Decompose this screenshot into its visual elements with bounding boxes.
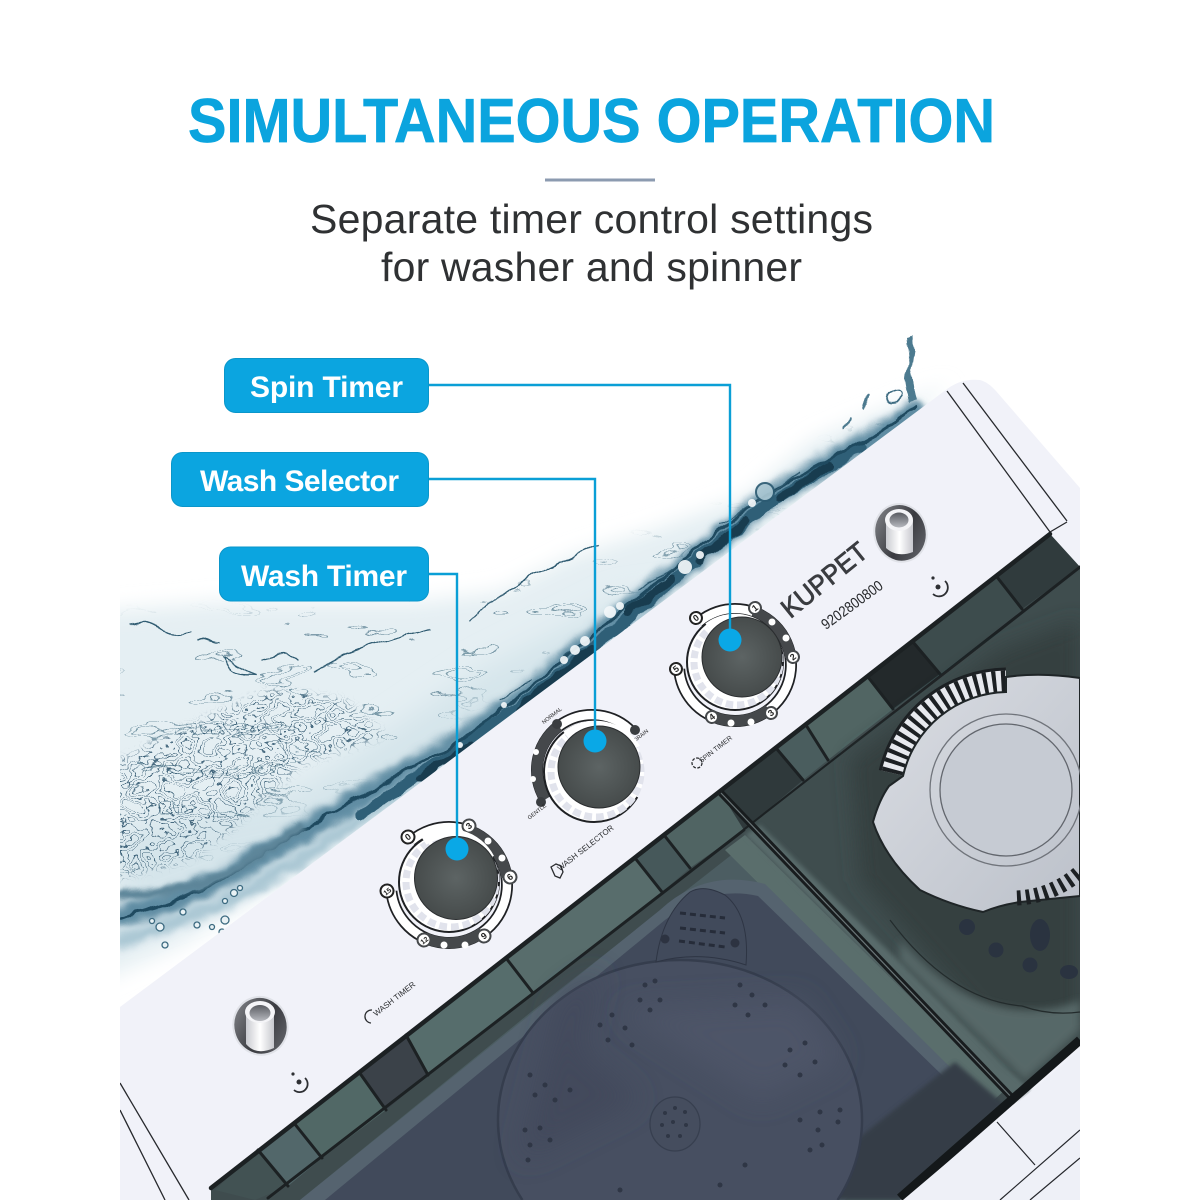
dial numbers: 9 [479,931,489,941]
right spin tub [721,570,1080,1102]
divider between tubs [721,793,1016,1102]
drain button right [868,498,933,568]
marker dot: spin timer [718,628,742,652]
leader line: wash timer [429,574,457,849]
label: wash timer [220,547,428,601]
indicator icon left [291,1072,308,1092]
foam scribbles [130,470,800,700]
tub navy [300,880,960,1200]
divider bar [545,178,655,182]
bottom black frame edge [900,1040,1080,1198]
water bubbles [150,886,242,948]
plate hub [650,1097,700,1151]
dial numbers: 6 [505,872,515,882]
vent ring lower [1017,872,1080,898]
perforations [522,978,842,1192]
lid circles [930,714,1082,866]
panel printed labels [365,735,734,1023]
subtitle [310,196,873,290]
wash selector icon [551,864,563,878]
wash timer knob [367,803,531,967]
frame strip lines [211,534,1080,1198]
subtitle: for washer and spinner [381,244,802,290]
spin dial numbers: 3 [766,708,776,718]
label: wash selector: Wash Selector [200,465,399,498]
spinner holes [959,919,1078,979]
frame strip segments [215,534,1080,1200]
left wash tub [300,835,1005,1200]
dial numbers: 3 [464,821,474,831]
label: wash selector [172,452,428,506]
indicator icon right [931,576,948,596]
splash spike [846,336,916,428]
bottom right white body [903,1092,1080,1200]
selector labels: NORMAL [541,707,564,726]
model number: 9202800800 [818,577,886,633]
label: spin timer: Spin Timer [250,371,403,404]
title: SIMULTANEOUS OPERATION [188,87,995,156]
selector labels [527,707,650,821]
wash selector label: WASH SELECTOR [556,823,616,873]
transparent lid dark frame [211,534,1080,1200]
label: spin timer [224,358,428,412]
lid plate [873,675,1080,912]
water body [90,385,950,985]
dial numbers: 15 [383,887,393,897]
drain button left [227,991,294,1061]
dial numbers [378,817,519,949]
wash plate [498,960,862,1200]
spin dial numbers: 5 [671,664,681,674]
control panel body [120,380,1080,1200]
spin timer label: SPIN TIMER [698,735,734,765]
subtitle: Separate timer control settings [310,196,873,242]
spinner lid [873,675,1082,912]
selector labels: GENTLE [527,803,548,821]
tub frame [316,840,901,1200]
selector labels: DRAIN [633,729,650,744]
marker dot: wash timer [446,838,468,860]
water splash [120,335,930,976]
drain hood [656,889,747,965]
leader line: wash selector [429,479,595,741]
marker dot: wash selector [584,730,606,752]
wash timer icon [365,1010,372,1023]
washing machine photo illustration [90,336,1082,1200]
lid outlines on panel [120,383,1067,1200]
spin dial numbers: 1 [750,603,760,613]
spin dial numbers: 2 [788,652,798,662]
spin dial numbers [668,600,801,725]
dial numbers: 0 [403,832,413,842]
brand name: KUPPET [775,536,873,624]
leader line: spin timer [429,385,730,640]
vent ring upper [892,681,1006,773]
label: wash timer: Wash Timer [241,560,407,593]
wash timer label: WASH TIMER [372,980,417,1018]
spin dial numbers: 0 [691,613,701,623]
spin timer icon [692,758,702,768]
texture [120,423,883,873]
spin timer knob [656,586,814,744]
wash selector knob [516,694,668,846]
dial numbers: 12 [420,936,430,946]
spin dial numbers: 4 [707,712,717,722]
water edge band [120,408,915,942]
